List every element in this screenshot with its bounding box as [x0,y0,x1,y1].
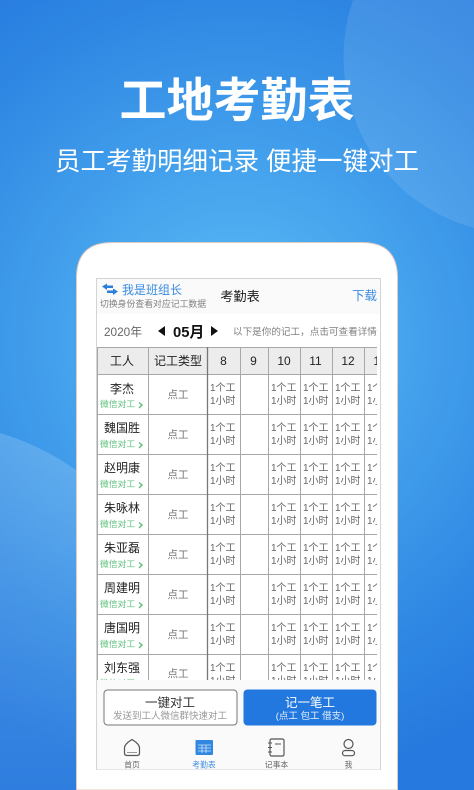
row: 周建明: 1小时 [271,595,297,607]
row: 周建明: 1个工 [303,582,329,594]
row: 周建明: 1小时 [367,595,393,607]
row: 刘东强: 1个工 [367,662,393,674]
row: 唐国明: 1个工 [210,622,236,634]
row: 赵明康: 1个工 [303,462,329,474]
date row [104,325,377,341]
month selector [158,325,218,341]
row: 朱亚磊: 朱亚磊 [104,541,140,555]
row: 魏国胜: 1小时 [367,435,393,447]
row: 朱咏林: 1个工 [210,502,236,514]
row: 李杰: 1小时 [367,395,393,407]
row: 朱咏林: 1个工 [303,502,329,514]
row: 魏国胜: 点工 [168,429,188,441]
row: 朱咏林: 1小时 [367,515,393,527]
button: one-click reconcile: 发送到工人微信群快速对工 [113,710,227,722]
row: 朱亚磊: 1小时 [335,555,361,567]
row: 朱亚磊: 1个工 [303,542,329,554]
row: 刘东强: 1小时 [303,675,329,687]
table header: 12 [341,354,355,368]
tab: attendance: 考勤表 [192,760,216,770]
row: 赵明康: 1小时 [303,475,329,487]
table header: 工人 [110,354,134,368]
year: 2020年 [104,325,142,339]
row: 刘东强: 1小时 [367,675,393,687]
row: 魏国胜: 1个工 [210,422,236,434]
row: 魏国胜: 1小时 [271,435,297,447]
row: 刘东强: 1个工 [271,662,297,674]
row: 李杰: 1小时 [335,395,361,407]
row: 刘东强: 1小时 [271,675,297,687]
row: 李杰: 1小时 [271,395,297,407]
row: 赵明康: 1个工 [210,462,236,474]
row: 周建明: 1个工 [210,582,236,594]
row: 赵明康: 1个工 [271,462,297,474]
row: 魏国胜: 魏国胜 [104,420,140,435]
decorative circle top right [343,0,474,228]
row: 周建明: 微信对工 [100,598,135,609]
row: 刘东强: 点工 [168,668,188,680]
row: 刘东强: 1小时 [210,675,236,687]
row: 李杰: 1个工 [210,382,236,394]
app screen [96,278,393,770]
row: 朱咏林: 朱咏林 [104,501,140,515]
row: 唐国明: 1个工 [271,622,297,634]
row: 李杰 [100,382,377,408]
row: 刘东强: 1个工 [303,662,329,674]
row: 魏国胜: 1小时 [335,435,361,447]
download link: 下载 [352,289,377,303]
row: 朱亚磊 [100,541,393,569]
row: 赵明康: 1个工 [367,462,393,474]
row: 刘东强: 刘东强 [104,661,140,675]
tab: home [124,740,140,770]
row: 赵明康: 1个工 [335,462,361,474]
row: 朱咏林: 1个工 [271,502,297,514]
row: 朱咏林: 1个工 [335,502,361,514]
grid lines [97,347,377,680]
row: 赵明康: 1小时 [271,475,297,487]
row: 周建明: 1小时 [210,595,236,607]
button: one-click reconcile [104,690,237,725]
row: 周建明: 1个工 [271,582,297,594]
row: 李杰: 1个工 [271,382,297,394]
table header: 记工类型 [154,354,202,368]
row: 朱亚磊: 1个工 [210,542,236,554]
row: 朱咏林: 1小时 [303,515,329,527]
row: 朱咏林 [100,501,393,529]
role hint: 切换身份查看对应记工数据 [100,298,206,309]
table header: 13 [373,354,387,368]
row: 唐国明: 1小时 [303,635,329,647]
row: 周建明 [100,581,393,609]
table header: 9 [250,354,257,368]
row: 唐国明: 1小时 [210,635,236,647]
row: 赵明康 [100,462,377,488]
row: 魏国胜: 1个工 [367,422,393,434]
row: 周建明: 1小时 [335,595,361,607]
row: 李杰: 1小时 [303,395,329,407]
row: 李杰: 1个工 [303,382,329,394]
row: 朱亚磊: 1小时 [210,555,236,567]
row: 朱咏林: 点工 [168,509,188,521]
row: 朱咏林: 1个工 [367,502,393,514]
row: 朱亚磊: 1个工 [271,542,297,554]
row: 赵明康: 点工 [168,469,188,481]
tab: home: 首页 [124,760,140,770]
row: 魏国胜 [100,422,377,448]
table header: 8 [220,354,227,368]
row: 魏国胜: 1小时 [210,435,236,447]
row: 刘东强: 1个工 [210,662,236,674]
row: 唐国明: 1小时 [335,635,361,647]
row: 唐国明: 1个工 [367,622,393,634]
row: 唐国明: 1个工 [335,622,361,634]
row: 魏国胜: 1小时 [303,435,329,447]
row: 刘东强 [100,662,377,680]
row: 李杰: 微信对工 [100,398,135,409]
row: 周建明: 周建明 [104,581,140,595]
tab: notebook [265,739,288,770]
row: 朱亚磊: 1小时 [271,555,297,567]
subtitle: 员工考勤明细记录 便捷一键对工 [55,148,419,176]
row: 刘东强: 微信对工 [100,677,135,688]
header bar [97,279,380,314]
row: 唐国明 [100,622,377,648]
row: 唐国明: 点工 [168,629,188,641]
table header: 10 [277,354,291,368]
row: 朱咏林: 微信对工 [100,518,135,529]
row: 赵明康: 赵明康 [104,460,140,475]
button: record work: (点工 包工 借支) [276,710,344,722]
attendance table [97,347,393,688]
row: 唐国明: 1小时 [271,635,297,647]
bottom tab bar [97,734,380,770]
row: 朱亚磊: 1个工 [335,542,361,554]
button: record work: 记一笔工 [285,695,335,710]
tab: me [342,740,354,770]
tab: notebook: 记事本 [265,760,288,770]
row: 赵明康: 微信对工 [100,478,135,489]
row: 朱咏林: 1小时 [335,515,361,527]
hint text: 以下是你的记工，点击可查看详情 [233,326,377,338]
row: 李杰: 点工 [168,389,188,401]
role label: 我是班组长 [122,283,182,297]
row: 李杰: 1个工 [335,382,361,394]
row: 周建明: 1个工 [367,582,393,594]
row: 赵明康: 1小时 [210,475,236,487]
table header: 11 [309,354,322,368]
button: one-click reconcile: 一键对工 [145,696,195,710]
table header [97,347,387,374]
phone mockup [76,242,398,790]
row: 朱亚磊: 1小时 [303,555,329,567]
row: 周建明: 点工 [168,589,188,601]
row: 魏国胜: 1个工 [335,422,361,434]
button: record work [244,690,376,726]
decorative circle bottom left [0,433,76,790]
icon: switch identity [102,284,118,295]
row: 魏国胜: 1个工 [271,422,297,434]
row: 唐国明: 微信对工 [100,638,135,649]
screen title: 考勤表 [220,289,260,304]
row: 朱亚磊: 微信对工 [100,558,135,569]
row: 周建明: 1小时 [303,595,329,607]
row: 朱亚磊: 点工 [168,549,188,561]
month selector: 05月 [173,325,204,341]
row: 周建明: 1个工 [335,582,361,594]
row: 唐国明: 唐国明 [104,620,140,635]
row: 魏国胜: 微信对工 [100,438,135,449]
tab: attendance [192,740,216,770]
row: 朱亚磊: 1个工 [367,542,393,554]
row: 李杰: 1个工 [367,382,393,394]
row: 唐国明: 1个工 [303,622,329,634]
row: 魏国胜: 1个工 [303,422,329,434]
tab: me: 我 [345,760,353,770]
title: 工地考勤表 [120,74,354,127]
row: 刘东强: 1个工 [335,662,361,674]
row: 朱咏林: 1小时 [210,515,236,527]
row: 李杰: 1小时 [210,395,236,407]
row: 李杰: 李杰 [110,381,134,396]
row: 朱咏林: 1小时 [271,515,297,527]
row: 朱亚磊: 1小时 [367,555,393,567]
action bar [97,680,380,734]
row: 赵明康: 1小时 [367,475,393,487]
row: 刘东强: 1小时 [335,675,361,687]
row: 唐国明: 1小时 [367,635,393,647]
row: 赵明康: 1小时 [335,475,361,487]
